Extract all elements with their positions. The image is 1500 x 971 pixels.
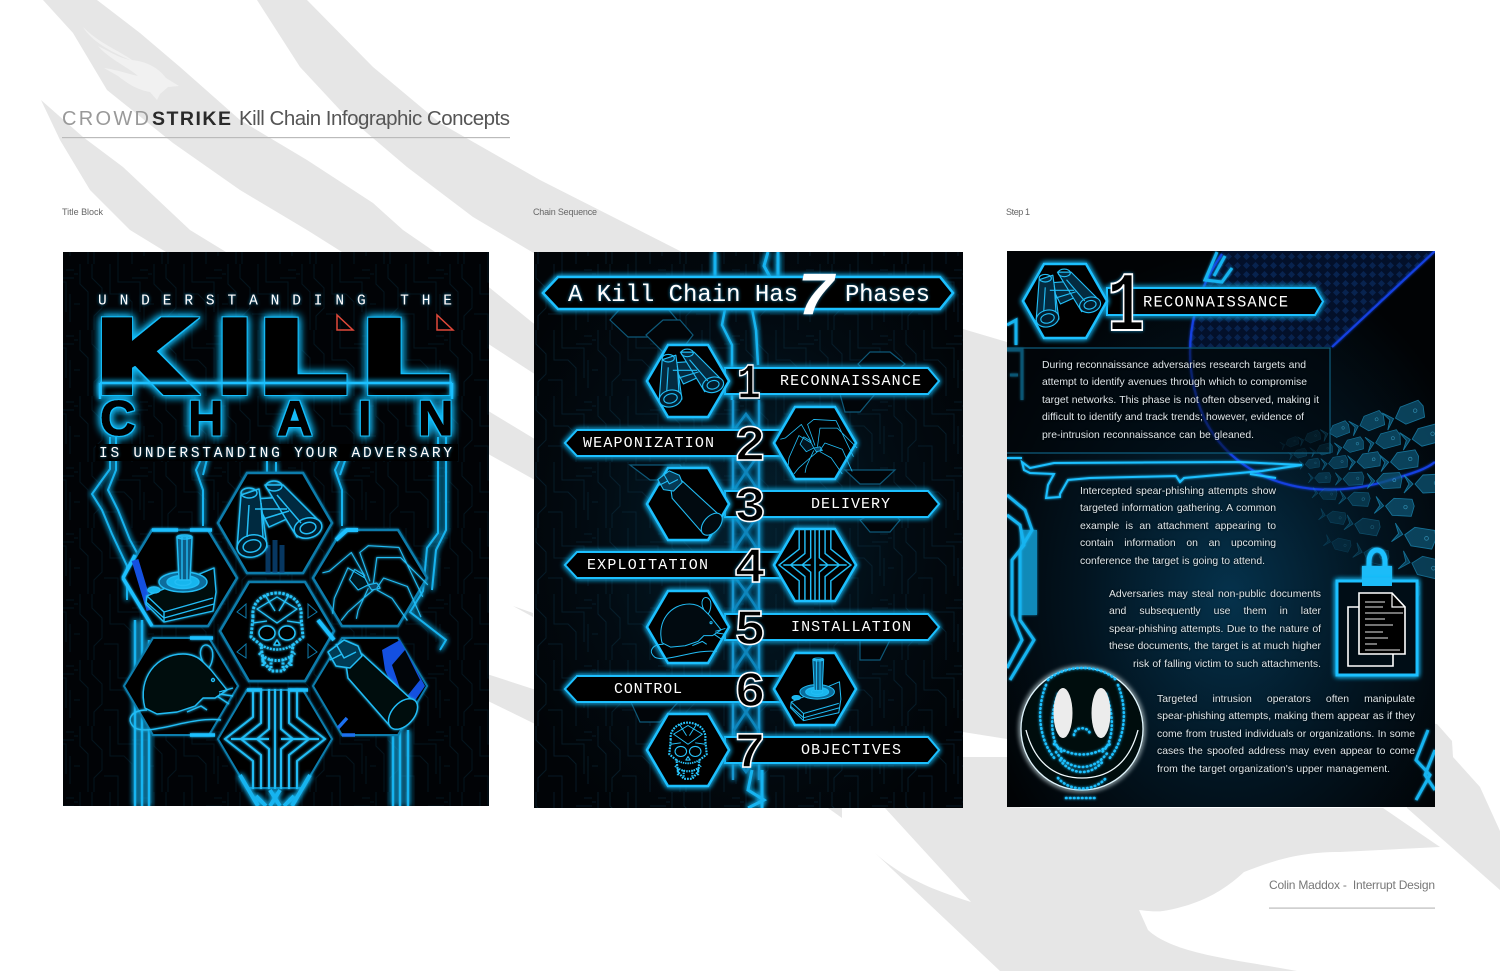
heading: KILL: L (263, 302, 344, 411)
phase 5: installation (647, 591, 939, 663)
hexagon: circuit (218, 689, 332, 806)
title (62, 107, 510, 130)
phase 5: installation: 5 (734, 603, 766, 660)
text block: reconnaissance overview: attempt to identify avenues through which to compromise (1042, 377, 1307, 388)
hexagon: skull (220, 582, 334, 681)
heading: KILL: K (100, 302, 188, 411)
phase 6: control: 6 (734, 665, 766, 722)
panel: chain sequence (534, 252, 963, 808)
title: CROWD (62, 108, 149, 130)
circuit decorations (1007, 252, 1435, 800)
text: is understanding your adversary: IS UNDERSTANDING YOUR ADVERSARY (99, 446, 452, 462)
credit: Colin Maddox - Interrupt Design (1269, 878, 1435, 892)
label: step 1: Step 1 (1006, 207, 1030, 217)
phase 7: objectives (647, 714, 939, 786)
phase 7: objectives: OBJECTIVES (801, 742, 901, 759)
text block: targeted intrusion operators: come from trusted individuals or organizations. In some (1157, 728, 1415, 740)
hexagon: joystick (123, 530, 237, 626)
heading: KILL: I (221, 301, 248, 411)
phase 1: reconnaissance: 1 (737, 356, 761, 413)
text block: targeted intrusion operators (1157, 694, 1415, 774)
text block: stolen documents (1109, 588, 1322, 670)
circuit traces (92, 437, 446, 806)
step header (1023, 261, 1323, 356)
icon: locked documents (1337, 550, 1417, 675)
background hexagons (610, 309, 905, 722)
hexagon: mouse (124, 638, 238, 735)
label: chain sequence: Chain Sequence (533, 207, 597, 217)
text block: intercepted spear-phishing: conference the target is going to attend. (1080, 556, 1265, 566)
text: understanding the: UNDERSTANDING THE (98, 294, 452, 310)
banner (538, 270, 958, 317)
icon: red triangles (337, 315, 453, 330)
title: STRIKE (152, 108, 231, 130)
text block: reconnaissance overview: target networks. This phase is not often observed, making it (1042, 394, 1319, 406)
dotted pattern and arc (1190, 251, 1435, 490)
step header: RECONNAISSANCE (1143, 294, 1288, 312)
tag rows (1280, 400, 1435, 596)
phase 2: weaponization: 2 (734, 419, 766, 476)
text block: intercepted spear-phishing: targeted information gathering. A common (1080, 503, 1276, 514)
hexagon: bomb (313, 638, 427, 735)
text block: stolen documents: Adversaries may steal non-public documents (1109, 588, 1321, 600)
phase 4: exploitation: 4 (734, 541, 766, 598)
icon: smiley skull (1021, 668, 1143, 798)
hexagon: binoculars (218, 473, 332, 573)
text block: intercepted spear-phishing (1080, 486, 1276, 567)
text block: reconnaissance overview (1042, 360, 1319, 441)
phase 6: control: CONTROL (614, 681, 682, 698)
text block: reconnaissance overview: During reconnaissance adversaries research targets and (1042, 360, 1306, 370)
phase 4: exploitation: EXPLOITATION (587, 557, 708, 574)
text block: targeted intrusion operators: from the target organization's upper management. (1157, 764, 1390, 774)
phase 1: reconnaissance: RECONNAISSANCE (780, 373, 921, 390)
phase 1: reconnaissance (647, 345, 939, 417)
phase 5: installation: INSTALLATION (791, 619, 911, 636)
text block: stolen documents: and subsequently use them in later (1109, 606, 1321, 617)
text block: targeted intrusion operators: Targeted intrusion operators often manipulate (1157, 694, 1415, 704)
phase 6: control (565, 653, 856, 725)
icon: spear gun (1007, 458, 1302, 498)
phase 3: delivery: DELIVERY (811, 496, 890, 513)
step header: 1 (1107, 261, 1145, 356)
text block: stolen documents: these documents, the target is at much higher (1109, 641, 1321, 652)
text block: stolen documents: risk of falling victim to such attachments. (1133, 658, 1321, 670)
text block: reconnaissance overview: pre-intrusion reconnaissance can be gleaned. (1042, 430, 1254, 440)
text block: stolen documents: spear-phishing attempts. Due to the nature of (1109, 624, 1321, 634)
banner: Phases (845, 282, 930, 309)
phase 2: weaponization: WEAPONIZATION (583, 435, 714, 452)
heading: CHAIN: CHAIN (100, 392, 453, 446)
phase 4: exploitation (565, 529, 856, 601)
phase 7: objectives: 7 (734, 726, 766, 783)
panel: step 1 (1007, 251, 1445, 807)
text block: reconnaissance overview: difficult to identify and track trends; however, evidence of (1042, 412, 1304, 423)
text block: targeted intrusion operators: spear-phishing attempts, making them appear as if they (1157, 711, 1415, 722)
label: title block: Title Block (62, 207, 104, 217)
heading: KILL: L (366, 302, 447, 411)
text block: intercepted spear-phishing: contain information on an upcoming (1080, 538, 1276, 549)
phase 3: delivery: 3 (734, 480, 766, 537)
banner: 7 (798, 262, 837, 326)
phase 2: weaponization (565, 407, 857, 479)
text box frame (1007, 348, 1330, 453)
central chain (715, 252, 778, 808)
text block: intercepted spear-phishing: example is an attachment appearing to (1080, 520, 1276, 532)
icon: crowdstrike eagle watermark (83, 27, 179, 100)
text block: targeted intrusion operators: cases the spoofed address may even appear to come (1157, 746, 1415, 757)
text block: intercepted spear-phishing: Intercepted spear-phishing attempts show (1080, 486, 1276, 496)
banner: A Kill Chain Has (568, 282, 798, 309)
underline glow (100, 383, 452, 399)
panel: title block (63, 252, 489, 806)
title: Kill Chain Infographic Concepts (239, 107, 510, 130)
hexagon: spider (313, 530, 428, 626)
phase 3: delivery (647, 468, 939, 540)
heading: KILL (100, 301, 447, 411)
